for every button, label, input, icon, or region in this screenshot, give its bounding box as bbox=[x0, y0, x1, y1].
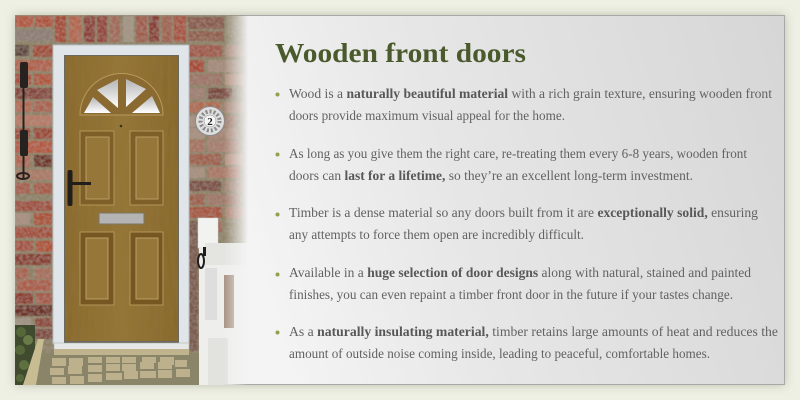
bullet 4: Available in a huge selection of door designs along with natural, stained and painted bbox=[289, 266, 751, 281]
bullet 5: As a naturally insulating material, timber retains large amounts of heat and reduces the bbox=[289, 325, 778, 340]
bullet 1: doors provide maximum visual appeal for the home. bbox=[289, 109, 565, 124]
bullet 2 bbox=[276, 147, 747, 184]
white gate bbox=[198, 218, 246, 385]
door bbox=[65, 56, 178, 341]
bullet 3 bbox=[276, 206, 758, 243]
house number plaque: 2 bbox=[207, 116, 213, 128]
bullet 1: Wood is a naturally beautiful material with a rich grain texture, ensuring wooden front bbox=[289, 87, 772, 102]
door handle bbox=[68, 170, 91, 206]
wall ironwork bbox=[17, 62, 29, 179]
timber edging bbox=[23, 339, 44, 385]
cobblestone path bbox=[36, 353, 199, 385]
house number plaque bbox=[196, 106, 224, 136]
brick wall bbox=[15, 15, 246, 353]
door lock dot bbox=[120, 125, 122, 127]
title: Wooden front doors bbox=[275, 37, 526, 68]
bullet 3: any attempts to force them open are incredibly difficult. bbox=[289, 228, 584, 243]
bullet list bbox=[276, 87, 778, 362]
lower left panel bbox=[80, 232, 114, 305]
bullet 1 bbox=[276, 87, 772, 124]
bullet 2: As long as you give them the right care, re-treating them every 6-8 years, wooden front bbox=[289, 147, 747, 162]
bullet 4 bbox=[276, 266, 751, 303]
upper right panel bbox=[130, 131, 163, 205]
bullet 3: Timber is a dense material so any doors built from it are exceptionally solid, ensuring bbox=[289, 206, 758, 221]
upper left panel bbox=[80, 131, 114, 205]
gate latch bbox=[198, 247, 206, 268]
letterbox bbox=[99, 213, 144, 224]
bullet 5: amount of outside noise coming inside, leading to peaceful, comfortable homes. bbox=[289, 347, 710, 362]
photo: brick wall and door bbox=[15, 15, 269, 385]
door frame bbox=[53, 45, 189, 344]
plant bbox=[15, 325, 35, 385]
door fanlight window bbox=[80, 74, 163, 115]
lower right panel bbox=[130, 232, 163, 305]
bullet 4: finishes, you can even repaint a timber front door in the future if your tastes change. bbox=[289, 288, 733, 303]
door sill bbox=[54, 343, 189, 355]
bullet 2: doors can last for a lifetime, so they’re an excellent long-term investment. bbox=[289, 169, 693, 184]
bullet 5 bbox=[276, 325, 778, 362]
